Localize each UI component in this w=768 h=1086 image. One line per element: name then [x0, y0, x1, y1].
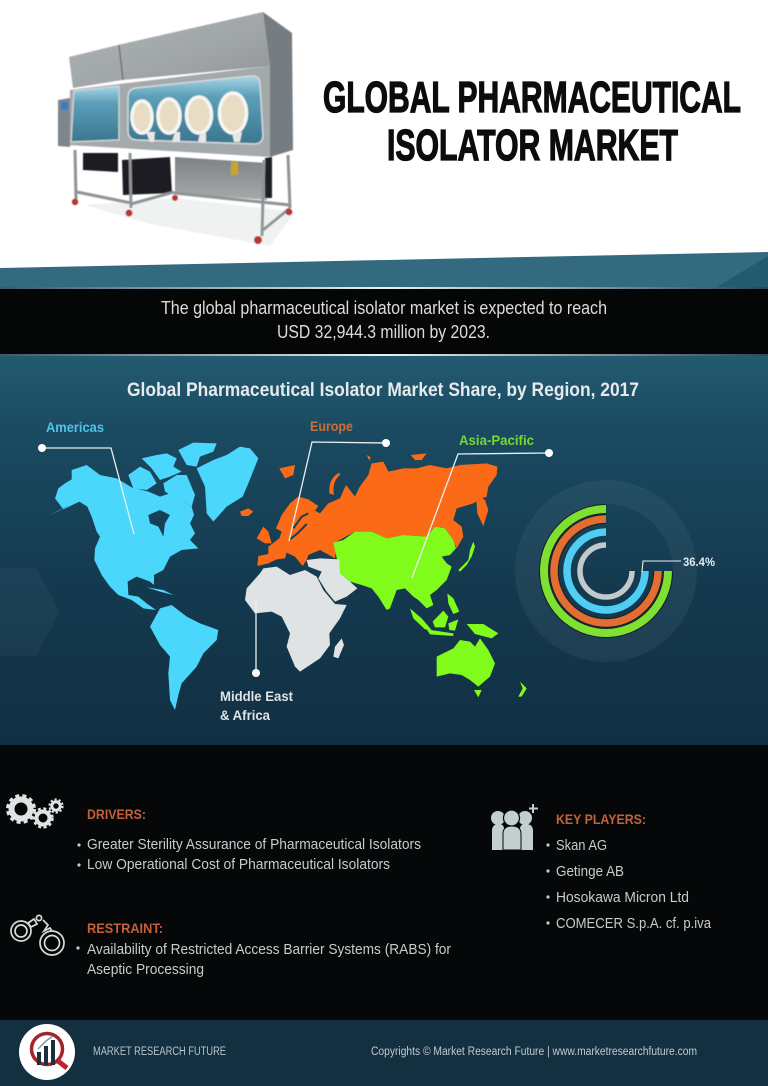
- list: restraint: Aseptic Processing: [87, 961, 204, 978]
- callout: Asia-Pacific: Asia-Pacific: [459, 432, 534, 448]
- list: restraint: Availability of Restricted Access Barrier Systems (RABS) for: [87, 941, 451, 958]
- list: drivers: Greater Sterility Assurance of Pharmaceutical Isolators: [87, 836, 421, 853]
- callout: Asia-Pacific: [412, 432, 553, 578]
- callout: Europe: [289, 418, 390, 541]
- panel: regional market share: [0, 356, 768, 745]
- list: key players: [546, 837, 712, 932]
- list: drivers: Low Operational Cost of Pharmaceutical Isolators: [87, 856, 390, 873]
- panel: market forecast banner: The global pharmaceutical isolator market is expected to reach: [161, 298, 607, 318]
- callout: Americas: Americas: [46, 419, 104, 435]
- heading: key players: KEY PLAYERS:: [556, 811, 646, 827]
- map: Middle East and Africa: [245, 558, 357, 672]
- radial bar chart: 36.4%: [683, 555, 715, 569]
- list: restraint: [76, 941, 451, 978]
- teal ribbon band: [0, 252, 768, 288]
- map: Asia-Pacific: [333, 527, 527, 697]
- callout: Middle East and Africa: & Africa: [220, 707, 270, 723]
- map: Europe and Russia: [240, 453, 497, 566]
- list: key players: Getinge AB: [556, 863, 624, 880]
- panel: drivers, restraint and key players: [0, 745, 768, 1020]
- callout: Middle East and Africa: Middle East: [220, 688, 293, 704]
- list: key players: Skan AG: [556, 837, 607, 854]
- heading: chart title: Global Pharmaceutical Isolator Market Share, by Region, 2017: [127, 380, 639, 401]
- title: [323, 73, 741, 170]
- illustration: pharmaceutical isolator machine: [58, 12, 295, 246]
- heading: restraint: RESTRAINT:: [87, 920, 163, 936]
- map: Americas: [49, 443, 258, 710]
- icon: handcuffs: [11, 915, 64, 955]
- callout: Middle East and Africa: [220, 600, 293, 723]
- text: copyright: Copyrights © Market Research Future | www.marketresearchfuture.com: [371, 1046, 697, 1058]
- callout: Americas: [38, 419, 134, 534]
- panel: market forecast banner: [0, 287, 768, 356]
- list: drivers: [77, 836, 421, 873]
- callout: Europe: Europe: [310, 418, 353, 434]
- icon: gears: [8, 796, 63, 828]
- list: key players: Hosokawa Micron Ltd: [556, 889, 689, 906]
- icon: people: [491, 804, 538, 850]
- text: company name: MARKET RESEARCH FUTURE: [93, 1046, 226, 1058]
- heading: drivers: DRIVERS:: [87, 806, 146, 822]
- list: key players: COMECER S.p.A. cf. p.iva: [556, 915, 712, 932]
- panel: market forecast banner: USD 32,944.3 million by 2023.: [277, 322, 490, 342]
- radial bar chart: [527, 492, 715, 650]
- icon: company logo: [19, 1024, 75, 1080]
- panel: footer: [0, 1020, 768, 1086]
